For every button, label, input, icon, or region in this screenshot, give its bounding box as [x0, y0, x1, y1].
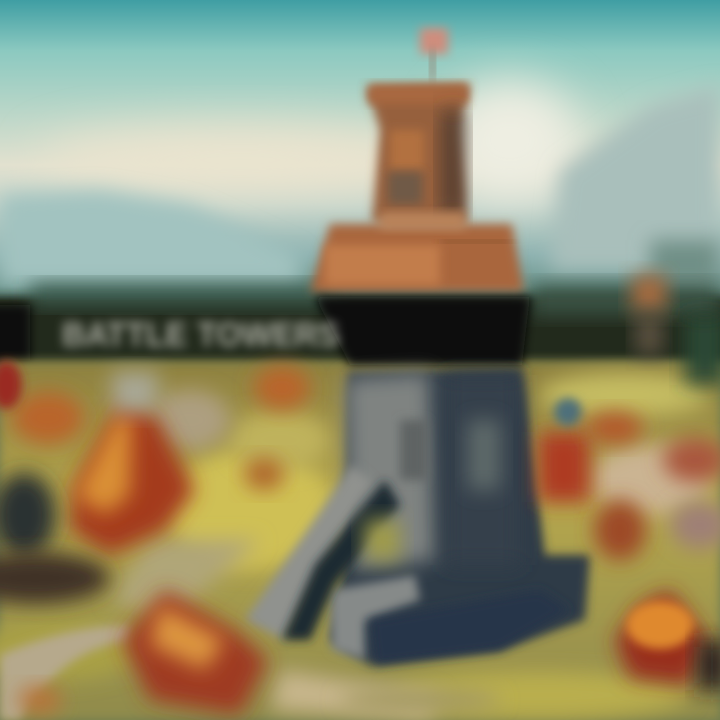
tower black overhang: [315, 297, 530, 365]
right orange tent: [615, 590, 720, 690]
sky background: [0, 0, 720, 300]
ground: [0, 362, 720, 720]
tower stairway: [245, 465, 400, 640]
left orange tent: [70, 372, 195, 555]
left dark tower: [0, 473, 110, 604]
front orange tent: [18, 590, 268, 715]
dark band behind title: [0, 284, 720, 362]
tower lower brick platform: [310, 212, 524, 292]
left background tents: [0, 361, 310, 490]
tower stone base: [330, 368, 590, 665]
right red tower: [538, 398, 720, 560]
flag: [420, 28, 448, 80]
right distant turret: [632, 275, 720, 385]
title: [62, 316, 340, 354]
tower upper keep: [367, 84, 470, 222]
title: BATTLE: [62, 316, 187, 354]
clouds and distant mountains: [0, 80, 720, 290]
title: TOWERS: [197, 316, 340, 354]
